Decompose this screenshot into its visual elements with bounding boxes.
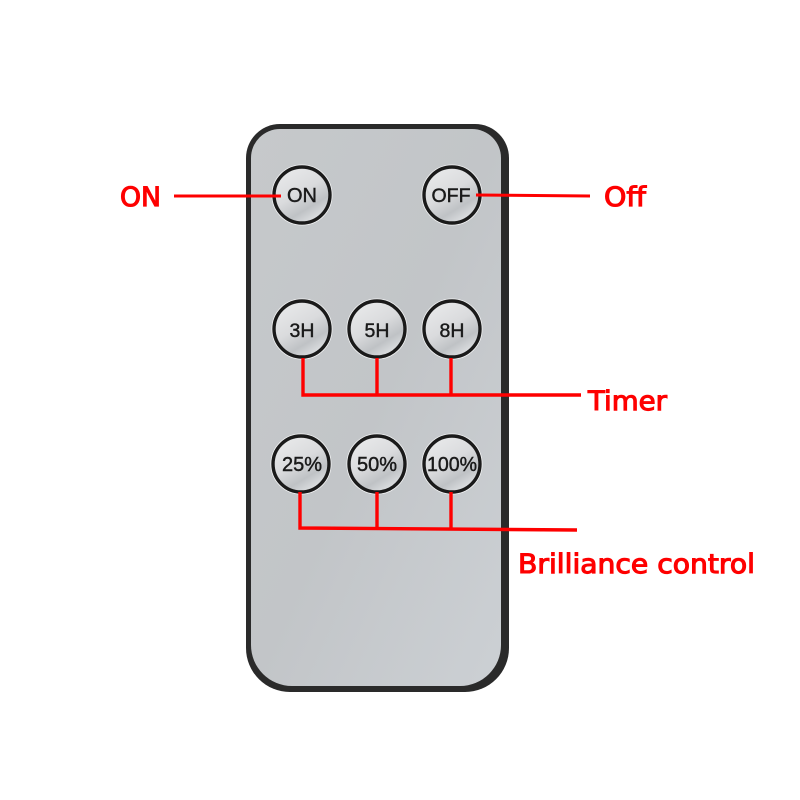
button: ON — [272, 165, 332, 225]
button: 50%: 50% — [357, 454, 397, 476]
button: 5H — [347, 299, 407, 359]
bracket: brilliance control — [300, 492, 577, 530]
button: OFF — [422, 165, 482, 225]
label: Off: Off — [604, 182, 647, 213]
button: OFF: OFF — [432, 185, 471, 207]
button: 50% — [347, 434, 407, 494]
bracket: timer — [303, 358, 581, 395]
connector line: ON — [174, 194, 281, 198]
button: 3H — [272, 299, 332, 359]
label: Timer: Timer — [587, 386, 668, 417]
label: Brilliance control: Brilliance control — [518, 549, 755, 580]
button: 3H: 3H — [290, 320, 314, 342]
connector line: OFF — [476, 195, 590, 196]
button: 5H: 5H — [365, 320, 389, 342]
button: 25% — [271, 434, 331, 494]
button: 100%: 100% — [427, 454, 477, 476]
label: ON: ON — [120, 182, 161, 213]
button: 8H: 8H — [440, 320, 464, 342]
button: 100% — [422, 434, 482, 494]
button: 25%: 25% — [282, 454, 322, 476]
button: 8H — [422, 299, 482, 359]
remote control body — [246, 124, 509, 692]
button: ON: ON — [287, 185, 317, 207]
